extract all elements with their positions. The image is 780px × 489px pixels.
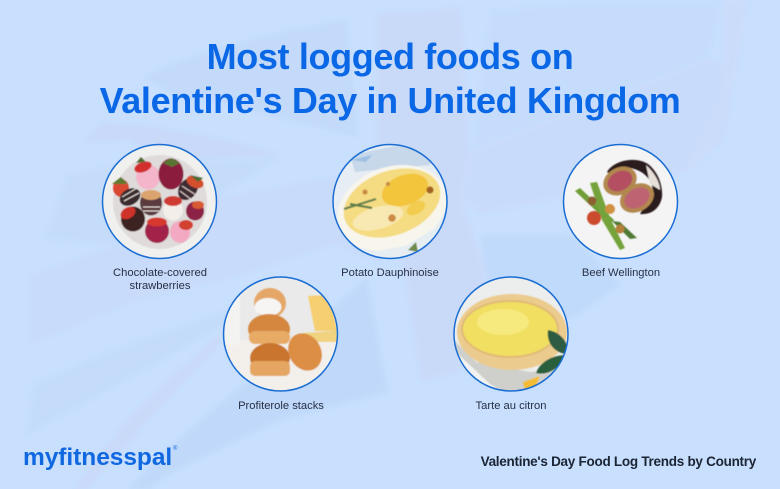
logo: myfitnesspal: myfitnesspal [23,444,172,471]
food photo: beef wellington [564,144,678,258]
food photo: profiterole stacks [223,277,338,395]
food photo: tarte au citron [454,277,568,395]
title: Valentine's Day in United Kingdom [100,80,680,121]
label: profiterole stacks: Profiterole stacks [238,400,324,412]
footer title: Valentine's Day Food Log Trends by Country [481,454,756,469]
illustrations: five food photos as circles [102,144,678,392]
food photo: potato dauphinoise [334,145,446,258]
food photo: chocolate-covered strawberries [102,144,216,258]
text: ® [173,446,177,452]
label: beef wellington: Beef Wellington [582,266,660,278]
circle outlines [102,144,678,391]
label: tarte au citron: Tarte au citron [476,400,546,412]
title [100,36,680,121]
label: chocolate-covered strawberries: Chocolate-covered [113,266,207,278]
label: potato dauphinoise: Potato Dauphinoise [341,266,439,278]
label: chocolate-covered strawberries: strawberries [130,280,190,292]
title: Most logged foods on [207,36,573,77]
label: chocolate-covered strawberries [113,266,207,292]
